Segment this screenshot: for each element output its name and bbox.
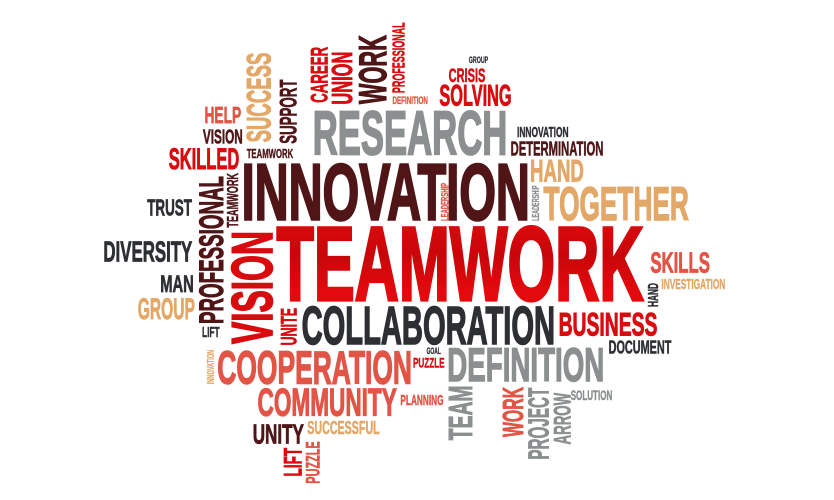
word: PUZZLE red: PUZZLE <box>413 354 445 370</box>
word: PUZZLE vertical: PUZZLE <box>303 441 325 484</box>
word: COLLABORATION: COLLABORATION <box>302 297 555 356</box>
word: HELP: HELP <box>204 102 241 128</box>
word: SOLUTION: SOLUTION <box>571 387 612 403</box>
word: DETERMINATION: DETERMINATION <box>511 139 603 161</box>
word: DEFINITION small: DEFINITION <box>392 95 428 107</box>
word: TEAM: TEAM <box>442 386 479 440</box>
word: DIVERSITY: DIVERSITY <box>103 236 192 268</box>
word: DOCUMENT: DOCUMENT <box>609 338 671 358</box>
word: WORK bottom: WORK <box>498 387 530 437</box>
word: UNITE: UNITE <box>276 308 301 346</box>
word: DEFINITION large: DEFINITION <box>447 339 604 392</box>
word: PLANNING: PLANNING <box>400 392 444 409</box>
word: GROUP: GROUP <box>138 293 195 326</box>
word: INNOVATION: INNOVATION <box>242 147 530 236</box>
word: UNION: UNION <box>327 52 359 105</box>
word: SKILLS: SKILLS <box>650 247 710 279</box>
word: HAND: HAND <box>530 152 584 188</box>
word: PROJECT: PROJECT <box>524 387 556 460</box>
word: CAREER: CAREER <box>307 47 334 103</box>
word: SKILLED: SKILLED <box>169 143 239 176</box>
word: TRUST: TRUST <box>147 195 192 221</box>
word: ARROW: ARROW <box>551 392 577 444</box>
word: MAN: MAN <box>160 271 194 298</box>
word: HAND vertical: HAND <box>646 283 662 307</box>
word: TOGETHER: TOGETHER <box>544 178 689 231</box>
word: SUCCESSFUL: SUCCESSFUL <box>307 417 380 438</box>
word: INNOVATION medium: INNOVATION <box>517 125 569 141</box>
word: VISION large: VISION <box>221 231 285 344</box>
word: COOPERATION: COOPERATION <box>217 342 412 394</box>
word: GROUP small: GROUP <box>469 55 488 65</box>
word: RESEARCH: RESEARCH <box>313 99 507 168</box>
word: UNITY: UNITY <box>253 419 304 450</box>
word: LIFT small: LIFT <box>202 325 220 341</box>
word: LEADERSHIP grey: LEADERSHIP <box>531 185 542 221</box>
word: TEAMWORK vertical: TEAMWORK <box>225 173 242 228</box>
word: SOLVING: SOLVING <box>439 80 512 112</box>
word: TEAMWORK small: TEAMWORK <box>247 147 293 161</box>
word: INVESTIGATION: INVESTIGATION <box>661 277 725 293</box>
word: INNOVATION tiny: INNOVATION <box>206 350 217 384</box>
word: VISION small: VISION <box>203 127 243 149</box>
word: PROFESSIONAL large: PROFESSIONAL <box>193 176 231 324</box>
word: LIFT vertical: LIFT <box>280 448 307 476</box>
word: SUPPORT: SUPPORT <box>275 79 302 144</box>
word: BUSINESS: BUSINESS <box>559 306 657 342</box>
word: CRISIS: CRISIS <box>449 66 485 87</box>
word: LEADERSHIP red: LEADERSHIP <box>440 183 452 221</box>
word: GOAL: GOAL <box>426 346 441 356</box>
word: COMMUNITY: COMMUNITY <box>258 381 397 424</box>
